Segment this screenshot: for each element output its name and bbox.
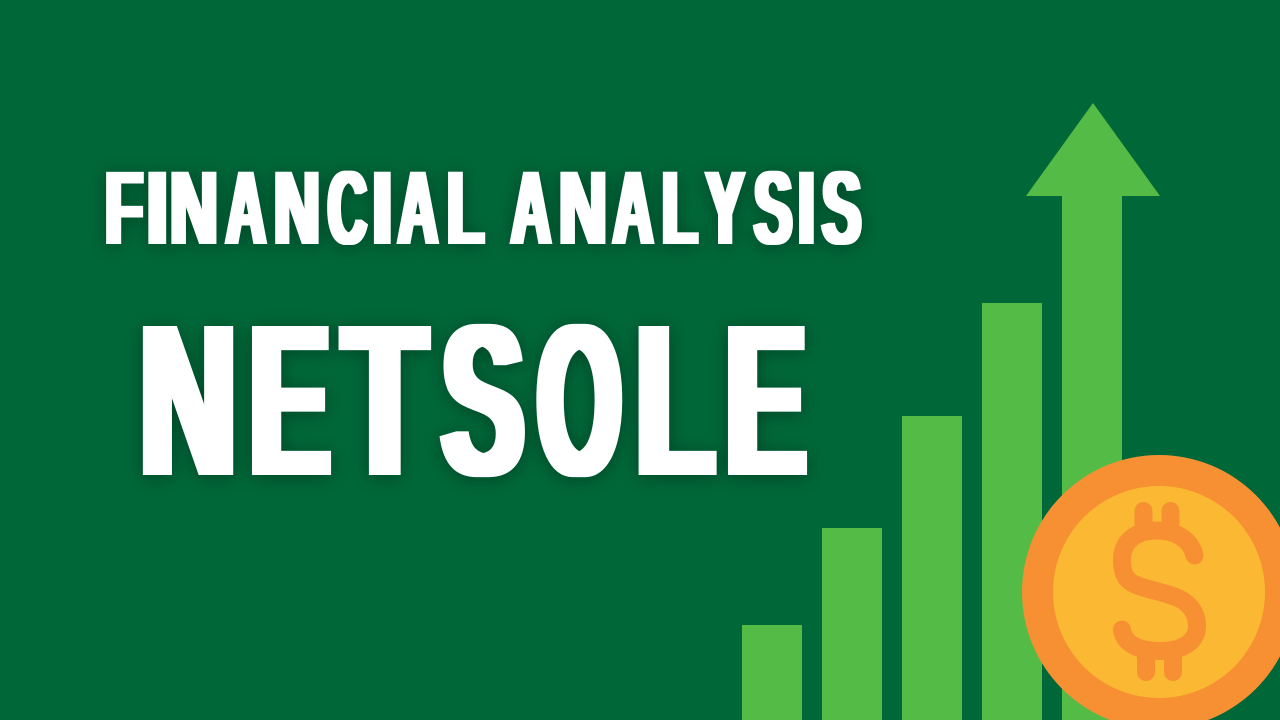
title: financial analysis [100,150,866,267]
heading: company name: L [636,279,714,521]
heading: company name: T [343,279,427,521]
heading: company name [137,279,812,521]
title: financial analysis: N [274,150,320,267]
title: financial analysis: I [146,150,168,267]
title: financial analysis: N [559,150,607,267]
title: financial analysis: F [105,150,143,267]
title: financial analysis: A [613,150,653,267]
title: financial analysis: L [447,150,484,267]
icon: dollar coin [1022,455,1280,720]
title: financial analysis: I [372,150,393,267]
title: financial analysis: A [226,150,265,267]
heading: company name: N [140,279,236,521]
title: financial analysis: Y [706,150,744,267]
title: financial analysis: L [662,150,698,267]
title: financial analysis: S [822,150,861,267]
heading: company name: O [538,279,620,521]
title: financial analysis: I [798,150,815,267]
heading: company name: E [726,279,806,521]
heading: company name: S [442,279,524,521]
bar chart with rising arrow [742,103,1160,720]
title: financial analysis: C [328,150,366,267]
title: financial analysis: N [170,150,218,267]
title: financial analysis: A [511,150,551,267]
title: financial analysis: S [754,150,792,267]
heading: company name: E [250,279,329,521]
title: financial analysis: A [398,150,438,267]
